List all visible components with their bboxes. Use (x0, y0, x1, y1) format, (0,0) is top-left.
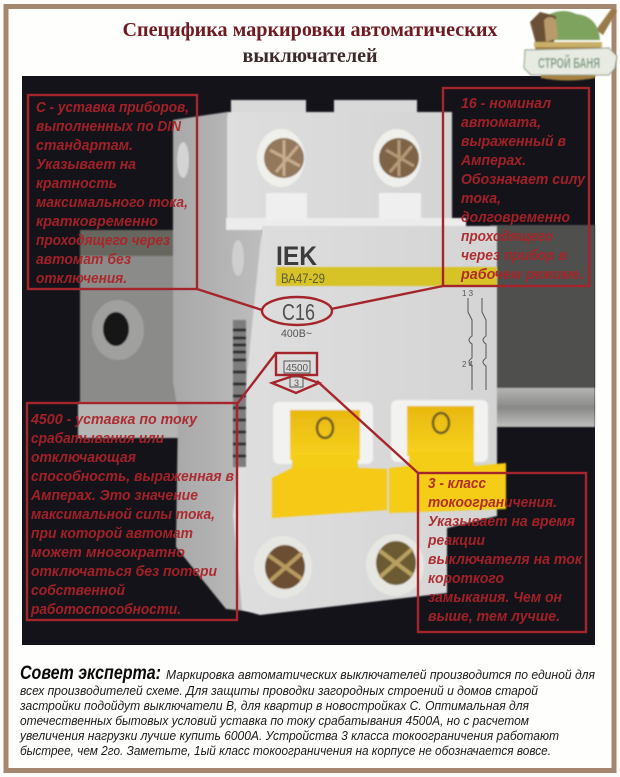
callout: C setting: проходящего через (36, 233, 171, 249)
callout: class 3: замыкания. Чем он (428, 590, 562, 606)
class 3 marker (272, 375, 319, 393)
callout: class 3: реакции (427, 533, 485, 549)
expert advice text: застройки подойдут выключатели В, для квартир в новостройках С. Оптимальная для (19, 698, 529, 713)
right rail (490, 225, 595, 427)
title: Специфика маркировки автоматических (122, 19, 498, 41)
callout: 4500 setting: срабатывания или (31, 431, 164, 447)
expert advice text: увеличения нагрузки лучше купить 6000А. Устройства 3 класса токоограничения работают (19, 728, 559, 743)
breaking capacity marking: 3 (294, 378, 299, 388)
IEK logo: IEK (276, 241, 317, 271)
callout: C setting: Указывает на (36, 157, 136, 173)
title (122, 19, 498, 67)
callout: C setting: С - уставка приборов, (36, 100, 189, 116)
callout: 4500 setting: собственной (31, 583, 125, 599)
callout: C setting: стандартам. (36, 138, 133, 154)
callout: 16 rating: долговременно (461, 210, 570, 226)
callout: 4500 setting: Амперах. Это значение (30, 488, 198, 504)
callout: C setting: кратность (36, 176, 117, 192)
4500 marker (276, 353, 317, 375)
left rail bracket (78, 230, 185, 438)
callout: 4500 setting: может многократно (31, 545, 185, 561)
circuit diagram (462, 289, 486, 390)
callout: class 3: 3 - класс (428, 476, 486, 492)
callout: C setting: автомат без (36, 252, 132, 268)
expert advice text: Совет эксперта: (20, 663, 161, 684)
callout: 4500 setting: отключающая (31, 450, 136, 466)
callout: 4500 setting: отключаться без потери (31, 564, 217, 580)
breaker upper block (226, 100, 466, 230)
callout: C setting: максимального тока, (36, 195, 188, 211)
callout: 16 rating: тока, (461, 191, 501, 207)
callout: C setting: отключения. (36, 271, 127, 287)
callout markers and connector lines (197, 286, 443, 473)
barcode (233, 320, 246, 467)
callout: 4500 setting (27, 403, 237, 620)
callout: 16 rating: 16 - номинал (461, 96, 551, 112)
voltage label: 400В~ (281, 328, 312, 340)
rating C16: C16 (282, 299, 315, 325)
callout: 16 rating: Обозначает силу (461, 172, 586, 188)
callout: C setting: выполненных по DIN (36, 119, 181, 135)
callout: 16 rating: рабочем режиме. (460, 267, 584, 283)
callout: 4500 setting: при которой автомат (31, 526, 193, 542)
bottom screws (254, 534, 424, 598)
rating ellipse (262, 297, 332, 325)
expert advice text: быстрее, чем 2го. Заметьте, 1ый класс токоограничения на корпусе не обозначается вовсе. (20, 743, 551, 758)
callout: class 3: токоограничения. (428, 495, 557, 511)
breaking capacity marking (284, 361, 310, 388)
breaker front panel (233, 226, 497, 615)
callout: 4500 setting: максимальной силы тока, (31, 507, 215, 523)
callout: class 3: выше, тем лучше. (428, 609, 560, 625)
callout: C setting: кратковременно (36, 214, 158, 230)
photo: circuit breaker on a DIN rail (22, 76, 595, 645)
left toggle switch (272, 402, 387, 518)
callout: 4500 setting: 4500 - уставка по току (30, 412, 198, 428)
breaking capacity marking: 4500 (286, 363, 308, 374)
callout: 16 rating: проходящего (461, 229, 553, 245)
callout: C setting (28, 95, 197, 289)
callout: class 3 (418, 473, 586, 632)
callout: 4500 setting: способность, выраженная в (31, 469, 234, 485)
callout: 4500 setting: работоспособности. (30, 602, 181, 618)
breaker side face (173, 112, 262, 612)
right toggle switch (389, 400, 506, 513)
callout: 16 rating (443, 88, 589, 286)
circuit diagram: 1 3 (462, 289, 474, 298)
model label: ВА47-29 (281, 270, 325, 286)
top screws (257, 129, 421, 187)
side mounting holes (177, 142, 261, 518)
expert advice text (19, 663, 595, 758)
expert advice text: Маркировка автоматических выключателей производится по единой для (166, 667, 595, 682)
callout: class 3: выключателя на ток (428, 552, 583, 568)
icon: bath bucket logo (524, 8, 617, 80)
expert advice text: всех производителей схеме. Для защиты проводки загородных строений и домов старой (20, 683, 538, 698)
title: выключателей (242, 45, 378, 67)
circuit diagram: 2 4 (462, 360, 474, 369)
callout: 16 rating: автомата, (461, 115, 541, 131)
yellow label strip (276, 267, 497, 286)
expert advice text: отечественных бытовых условий уставка по току срабатывания 4500А, но с расчетом (20, 713, 529, 728)
callout: 16 rating: выраженный в (461, 134, 566, 150)
callout: class 3: Указывает на время (428, 514, 575, 530)
callout: class 3: короткого (428, 571, 504, 587)
callout: 16 rating: Амперах. (460, 153, 526, 169)
callout: 16 rating: через прибор в (461, 248, 567, 264)
